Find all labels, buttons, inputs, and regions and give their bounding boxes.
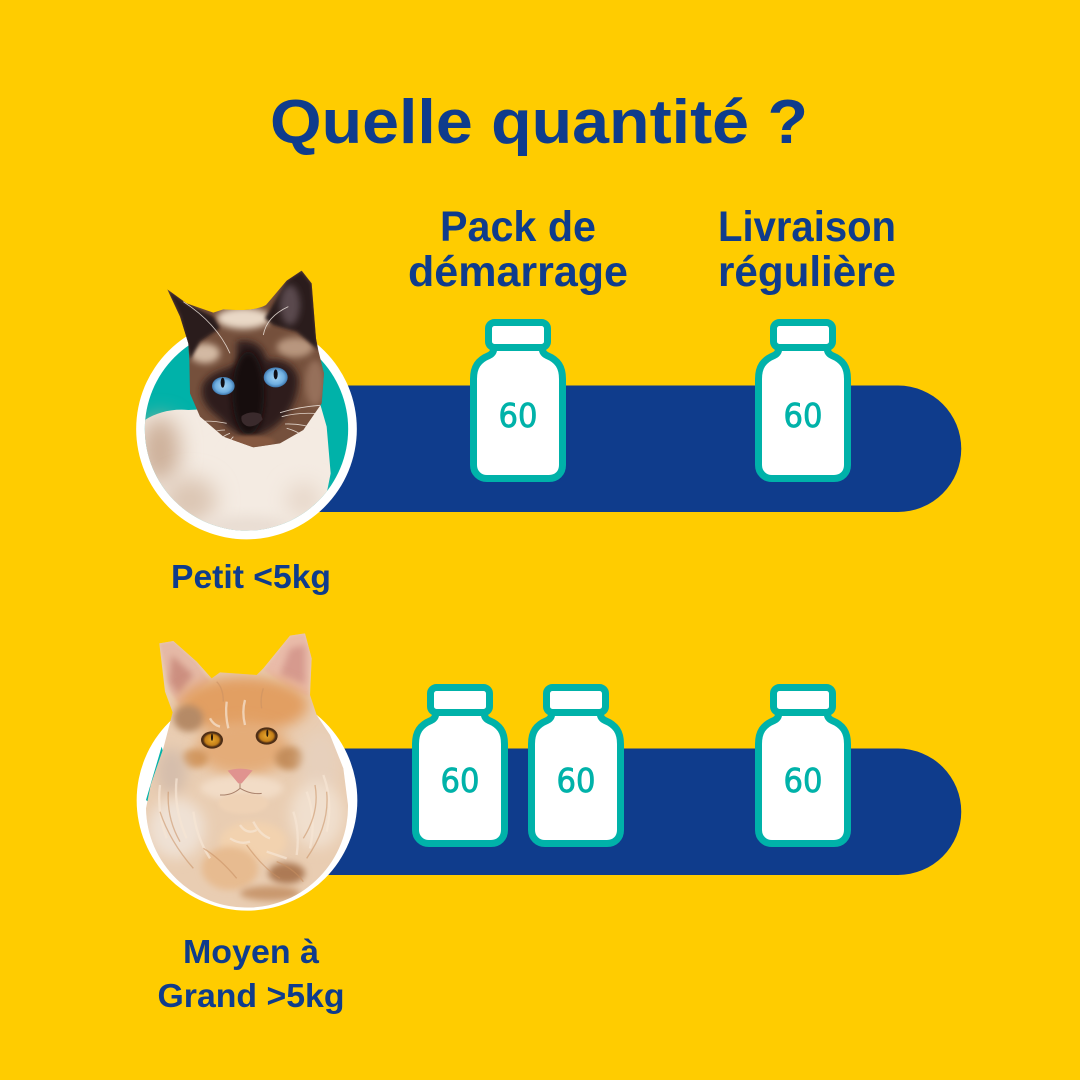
bottle: small cat regular delivery: 60 bbox=[784, 396, 822, 435]
illustration: siamese cat in circle bbox=[136, 267, 357, 539]
column heading: regular delivery: régulière bbox=[718, 248, 896, 296]
bottle: large cat starter pack first: 60 bbox=[440, 761, 480, 800]
bottle: large cat starter pack second bbox=[532, 688, 620, 844]
label: medium to large cat: Grand >5kg bbox=[158, 977, 344, 1014]
label: small cat: Petit <5kg bbox=[171, 558, 331, 595]
bottle: large cat starter pack second: 60 bbox=[556, 761, 596, 800]
bar: large cat row bbox=[300, 748, 961, 875]
column heading: starter pack: démarrage bbox=[408, 248, 628, 296]
column heading: regular delivery: Livraison bbox=[718, 203, 896, 251]
label: medium to large cat: Moyen à bbox=[183, 933, 320, 970]
bottle: small cat regular delivery bbox=[758, 322, 848, 478]
column heading: starter pack bbox=[408, 203, 628, 296]
column heading: starter pack: Pack de bbox=[440, 203, 596, 251]
column heading: regular delivery bbox=[718, 203, 896, 296]
bar: small cat row bbox=[300, 386, 961, 512]
bottle: large cat regular delivery bbox=[758, 688, 848, 844]
bottle: small cat starter pack: 60 bbox=[498, 396, 538, 435]
bottle: small cat starter pack bbox=[474, 322, 562, 478]
label: medium to large cat bbox=[158, 933, 344, 1014]
illustration: ginger cat in circle bbox=[137, 632, 357, 911]
title: Quelle quantité ? bbox=[270, 88, 808, 157]
bottle: large cat regular delivery: 60 bbox=[784, 761, 822, 800]
bottle: large cat starter pack first bbox=[416, 688, 504, 844]
